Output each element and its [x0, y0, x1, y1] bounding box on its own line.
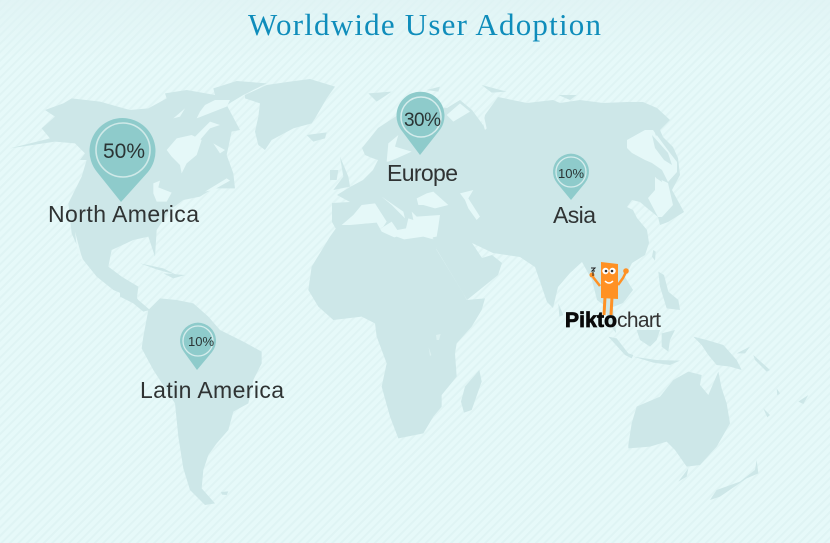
- map: Oceania and Southeast Asia: [608, 330, 808, 500]
- label: Asia: Asia: [553, 202, 596, 228]
- title: Worldwide User Adoption: [248, 7, 602, 42]
- pin: Asia 10%: [553, 154, 589, 200]
- map: East Asian seas and islands: [627, 130, 677, 217]
- Piktochart mascot: [590, 262, 629, 315]
- pin: Asia 10%: 10%: [558, 166, 584, 181]
- map: European seas and islands: [330, 85, 577, 242]
- Piktochart logo: chart: [617, 309, 661, 332]
- label: Latin America: Latin America: [140, 377, 284, 403]
- pin: North America 50%: 50%: [103, 140, 145, 163]
- map: Africa and Madagascar: [308, 223, 563, 438]
- pin: Latin America 10%: [180, 323, 216, 370]
- pin: Europe 30%: 30%: [404, 110, 441, 131]
- Piktochart logo: Pikto: [565, 309, 617, 332]
- pin: Europe 30%: [396, 92, 444, 155]
- map: Eurasia: [332, 97, 684, 333]
- map: North America: [10, 79, 335, 300]
- pin: Latin America 10%: 10%: [188, 334, 214, 349]
- label: Europe: Europe: [387, 160, 458, 186]
- world map: [10, 79, 808, 505]
- label: North America: North America: [48, 201, 199, 227]
- Piktochart logo: [565, 309, 661, 332]
- map: Japan and East Asian islands: [652, 250, 680, 310]
- pin: North America 50%: [90, 118, 156, 202]
- map: South America: [120, 288, 262, 505]
